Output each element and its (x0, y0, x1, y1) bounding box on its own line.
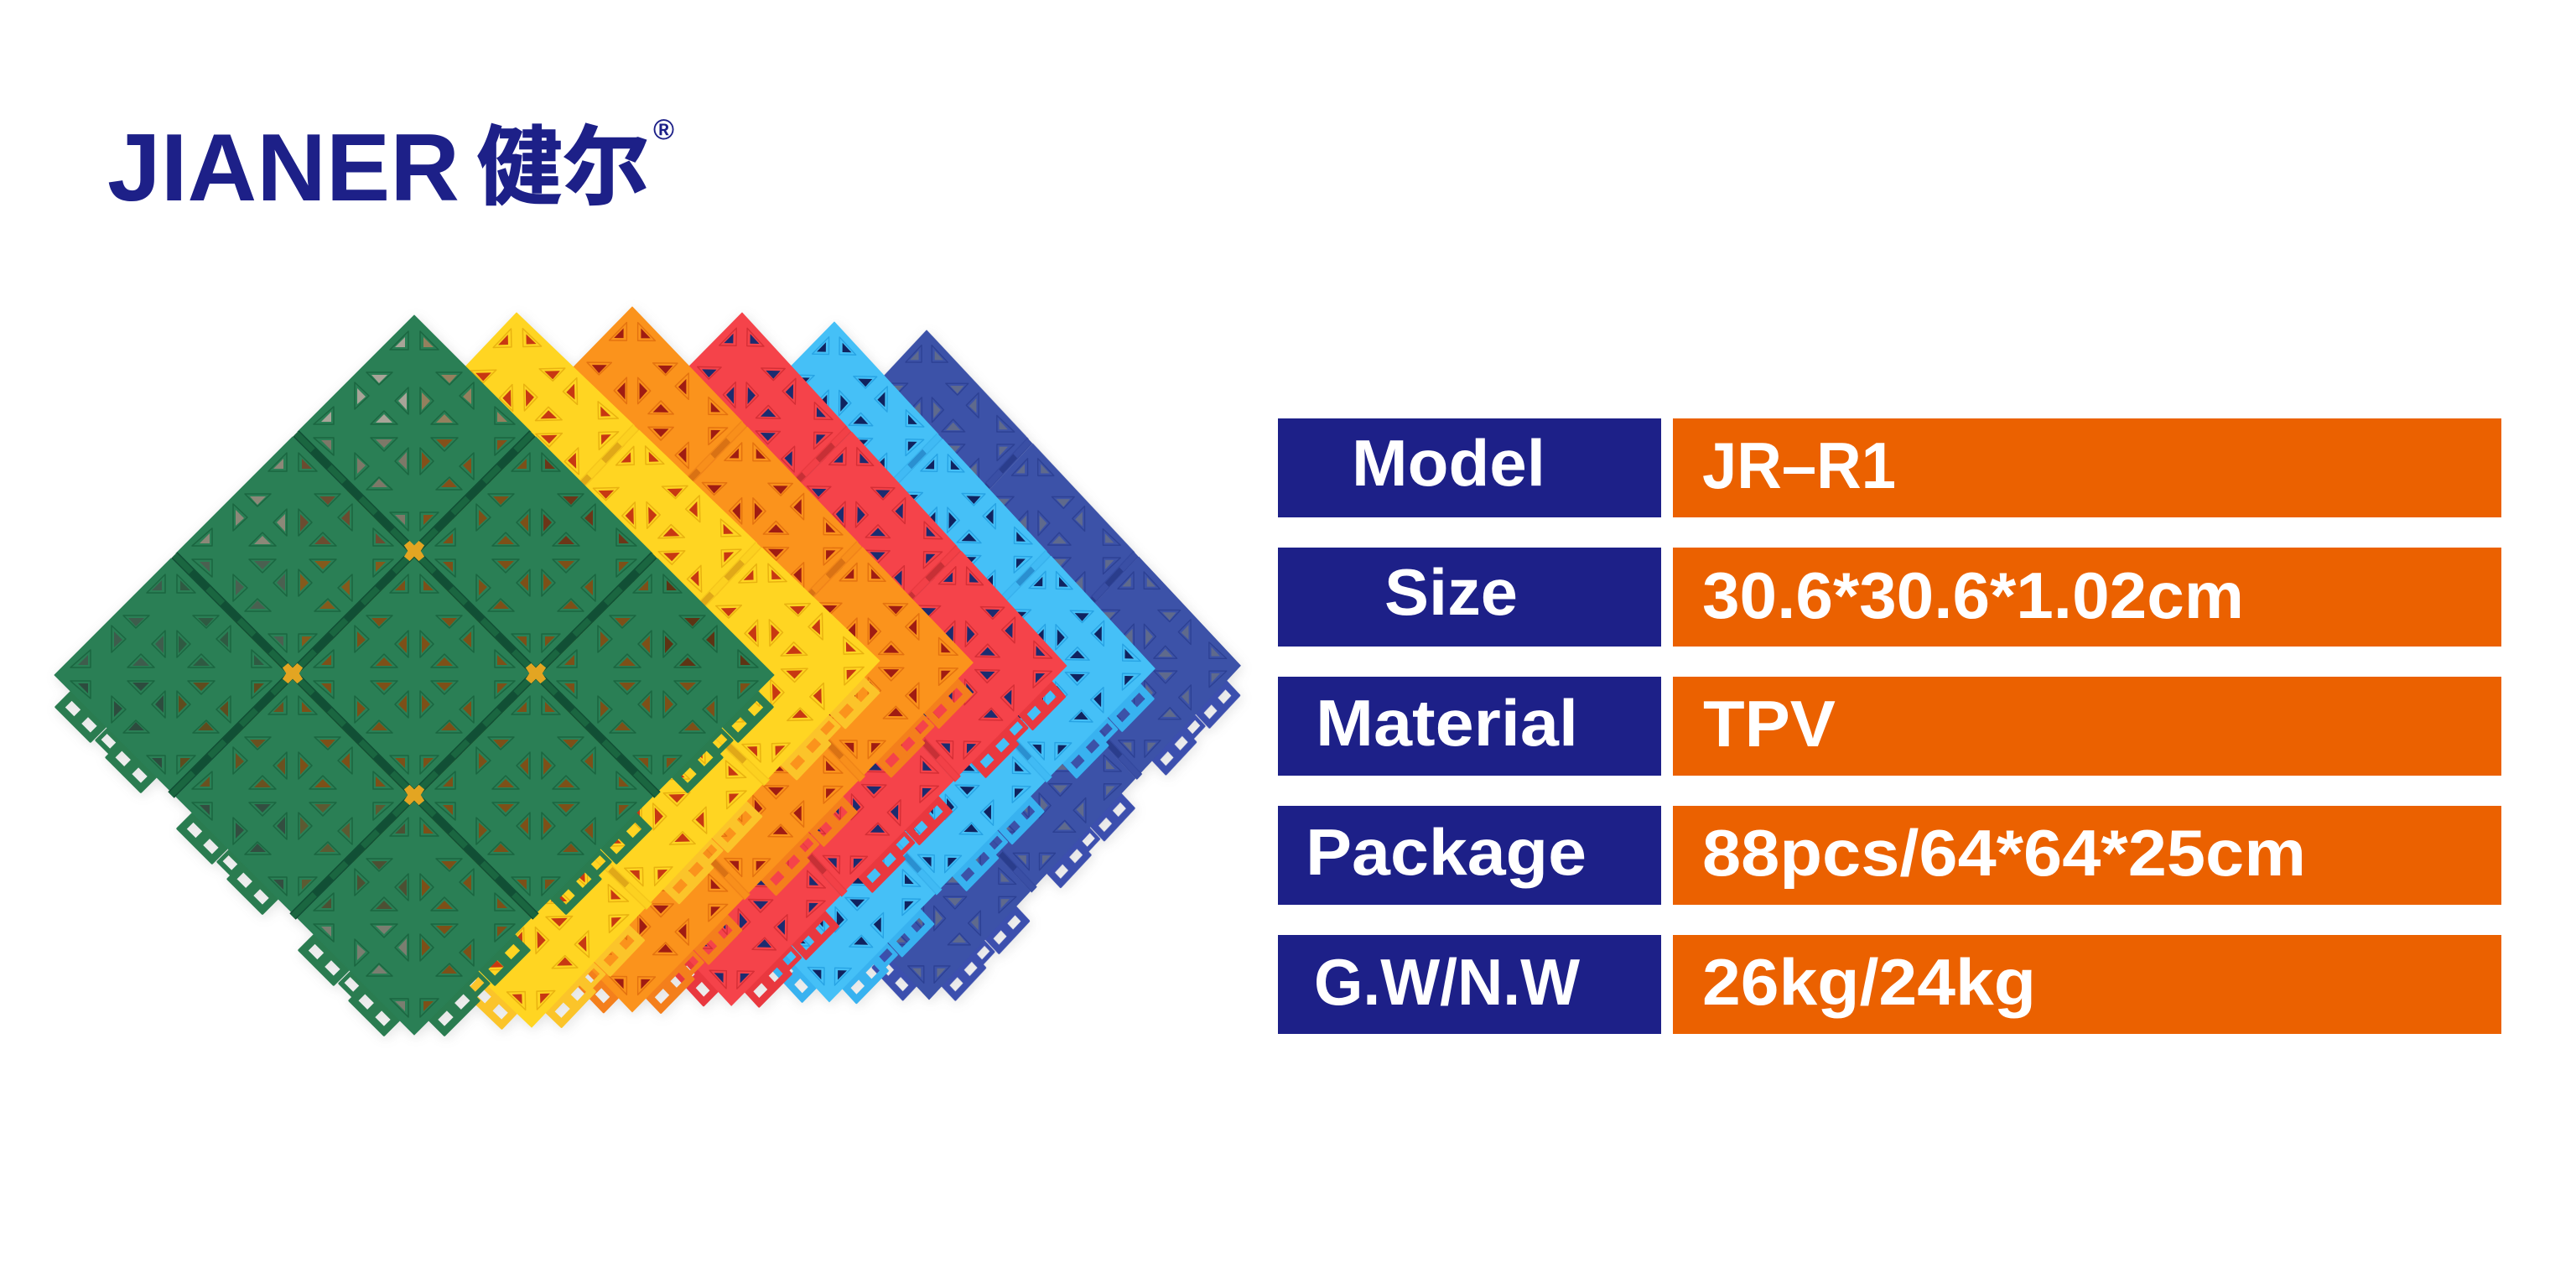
value text: TPV (1703, 687, 1836, 761)
mat: light blue (506, 315, 1157, 1009)
logo Chinese name: 健尔 (476, 119, 649, 216)
label cell (1278, 677, 1661, 776)
mat: orange (292, 304, 973, 1015)
value text: 88pcs/64*64*25cm (1702, 816, 2306, 890)
label text: G.W/N.W (1314, 945, 1580, 1019)
green mat connector loops (56, 690, 772, 1035)
row: Package (1278, 806, 2501, 905)
mat: red (402, 306, 1072, 1012)
label text: Size (1384, 555, 1518, 629)
value text: JR–R1 (1702, 428, 1896, 502)
mat: yellow (161, 304, 887, 1036)
logo: JIANER 健尔 (107, 114, 674, 221)
label text: Model (1352, 426, 1545, 500)
mat: green (front) (55, 315, 774, 1035)
product photo: stack of six coloured interlocking floor mats (55, 304, 1242, 1036)
label cell (1278, 418, 1661, 517)
value text: 26kg/24kg (1702, 945, 2036, 1019)
value cell (1673, 677, 2501, 776)
label text: Material (1316, 686, 1578, 760)
row: Model (1278, 418, 2501, 517)
specification table (1278, 418, 2501, 1034)
row: Material (1278, 677, 2501, 776)
label cell (1278, 935, 1661, 1034)
value cell (1673, 548, 2501, 647)
value cell (1673, 806, 2501, 905)
logo wordmark: JIANER (107, 115, 460, 221)
row: Size (1278, 548, 2501, 647)
value cell (1673, 935, 2501, 1034)
label cell (1278, 806, 1661, 905)
mat: navy (614, 330, 1242, 1000)
value text: 30.6*30.6*1.02cm (1702, 558, 2244, 632)
green mat tiles (55, 315, 774, 1035)
registered trademark mark: ® (653, 114, 674, 146)
row: G.W/N.W (1278, 935, 2501, 1034)
label text: Package (1306, 815, 1587, 889)
green mat seams and cross joints (171, 434, 657, 917)
label cell (1278, 548, 1661, 647)
value cell (1673, 418, 2501, 517)
